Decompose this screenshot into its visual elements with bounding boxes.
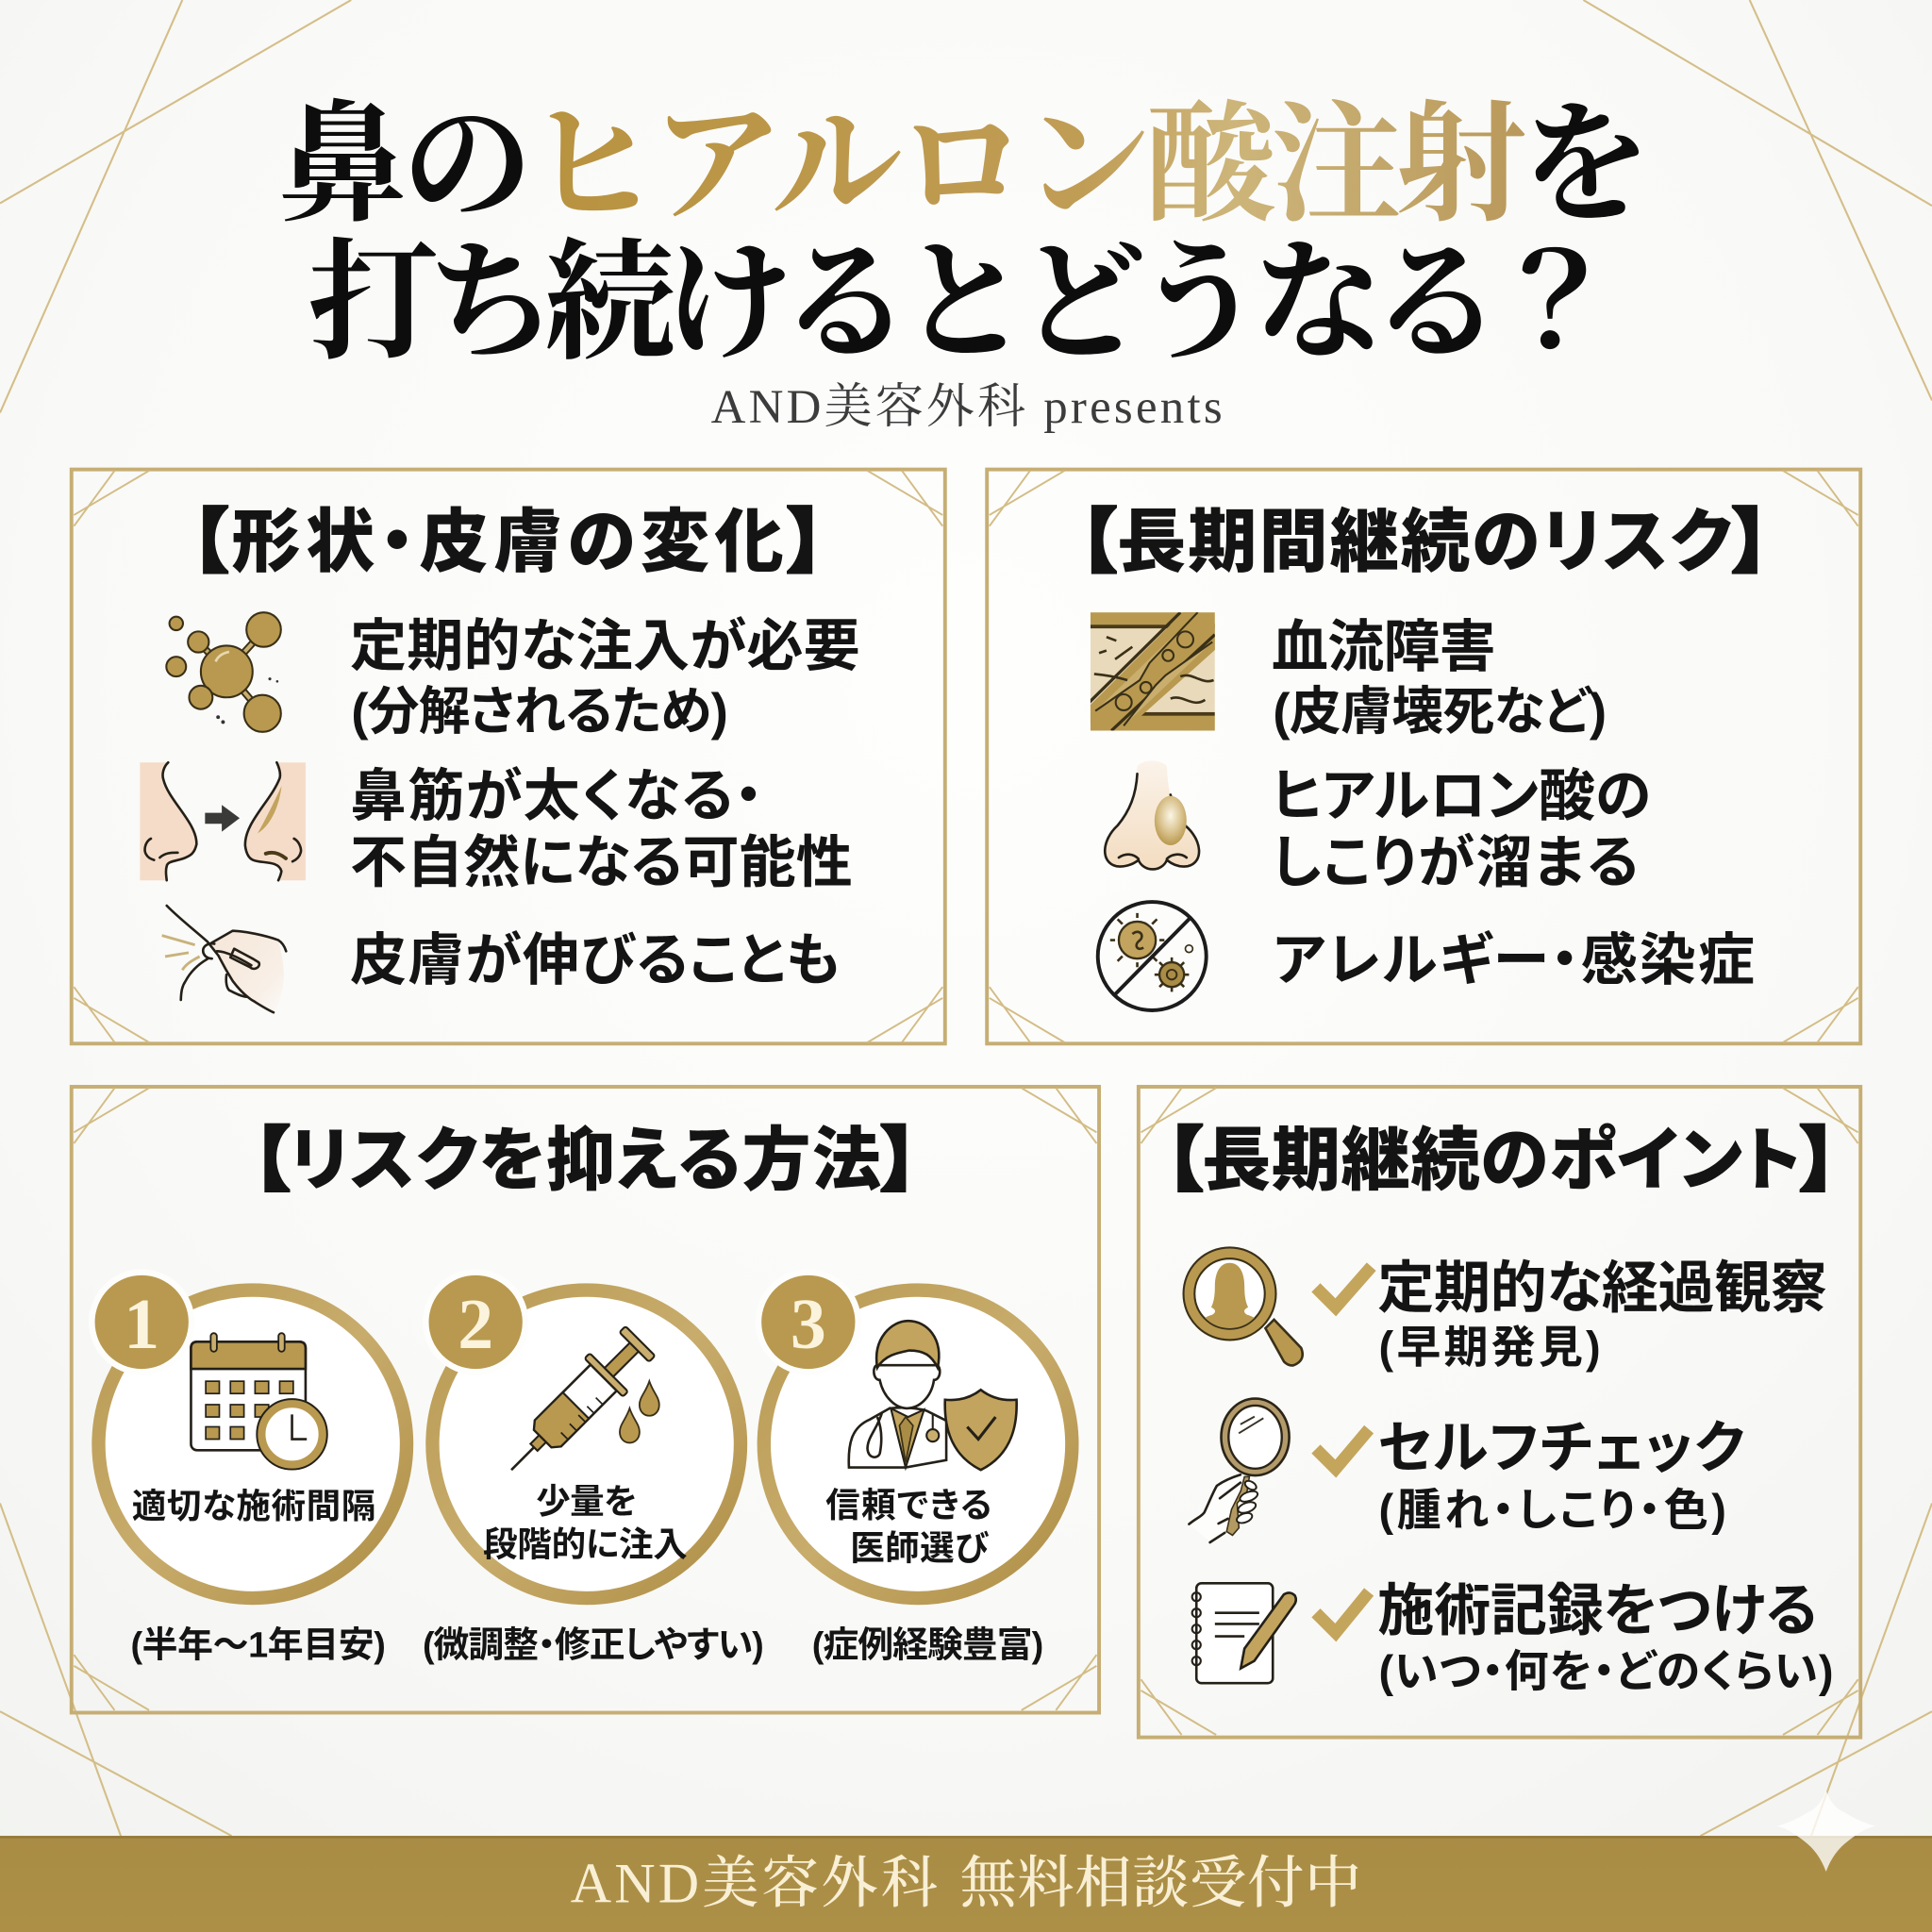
footer text: [571, 1852, 1361, 1915]
heading: long-term points: 【長期継続のポイント】: [1167, 1123, 1836, 1199]
item note: breakdown: (分解されるため): [351, 682, 728, 741]
icon: syringe and drops: [492, 1322, 659, 1490]
footer text: AND美容外科: [571, 1852, 938, 1915]
item text: hyaluronic acid: ヒアルロン酸の: [1272, 765, 1651, 828]
icon: nose bridge before and after: [140, 762, 306, 880]
item text: regular injections: 定期的な注入が必要: [350, 614, 860, 677]
item text: lumps accumulate: しこりが溜まる: [1272, 831, 1639, 894]
step 3 label: [825, 1486, 991, 1568]
icon: molecule: [166, 612, 281, 732]
subtitle: AND美容外科 presents: [711, 381, 1223, 434]
title: 打ち続けるとどうなる？: [308, 231, 1621, 375]
step 3 label: 信頼できる: [825, 1486, 991, 1524]
item text: blood flow disorder: 血流障害: [1272, 616, 1496, 679]
icon: calendar and clock: [191, 1333, 327, 1470]
step 2 label: [483, 1482, 688, 1564]
step badge 2: [423, 1269, 528, 1375]
icon: sparkle: [1776, 1790, 1875, 1872]
icon: nose with lump: [1105, 761, 1199, 869]
step 1 label: 適切な施術間隔: [132, 1487, 375, 1525]
step 3 label: 医師選び: [850, 1529, 989, 1568]
icon: hand mirror: [1189, 1399, 1290, 1542]
panel: long-term risks: [987, 470, 1860, 1043]
check mark 1: [1316, 1267, 1372, 1307]
item text: unnatural: 不自然になる可能性: [350, 831, 853, 894]
icon: notebook and pencil: [1192, 1583, 1296, 1683]
panel: long-term points: [1139, 1087, 1860, 1738]
step 1: appropriate interval: [89, 1269, 407, 1598]
step badge 3: [756, 1269, 861, 1375]
step 2 label: 少量を: [536, 1482, 637, 1521]
step 2: small staged injections: [423, 1269, 741, 1598]
note: treatment interval: (半年～1年目安): [130, 1626, 386, 1666]
icon: blood vessel blockage: [1091, 612, 1215, 730]
icon: magnifier with person: [1184, 1247, 1303, 1365]
item text: regular observation: 定期的な経過観察: [1377, 1257, 1827, 1320]
item note: when what how much: (いつ・何を・どのくらい): [1379, 1646, 1834, 1696]
icon: doctor with shield: [849, 1321, 1017, 1470]
title: 鼻のヒアルロン酸注射を: [277, 93, 1651, 238]
heading: shape and skin changes: 【形状・皮膚の変化】: [192, 505, 823, 581]
step badge 1: [89, 1269, 194, 1375]
panel: shape and skin changes: [72, 470, 945, 1043]
heading: ways to reduce risk: 【リスクを抑える方法】: [254, 1123, 917, 1199]
check mark 2: [1316, 1429, 1369, 1469]
icon: pinching stretched skin: [162, 906, 286, 1012]
item note: swelling lumps color: (腫れ・しこり・色): [1379, 1485, 1726, 1535]
item text: treatment record: 施術記録をつける: [1377, 1579, 1818, 1642]
note: easy adjustment: (微調整・修正しやすい): [423, 1626, 764, 1666]
panel: ways to reduce risk: [72, 1087, 1099, 1713]
step 3: trusted doctor: [756, 1269, 1072, 1598]
step badge 2: 2: [458, 1285, 493, 1364]
step 2 label: 段階的に注入: [483, 1525, 688, 1564]
item note: early detection: (早期発見): [1379, 1323, 1601, 1373]
footer band: [0, 1836, 1932, 1932]
icon: no bacteria: [1098, 902, 1207, 1010]
item text: skin stretches: 皮膚が伸びることも: [350, 928, 841, 991]
item text: self check: セルフチェック: [1377, 1417, 1744, 1480]
title: [277, 93, 1651, 375]
note: rich experience: (症例経験豊富): [812, 1626, 1043, 1666]
step badge 1: 1: [124, 1285, 159, 1364]
step badge 3: 3: [791, 1285, 826, 1364]
heading: long-term risks: 【長期間継続のリスク】: [1080, 505, 1768, 581]
item text: thicker nose bridge: 鼻筋が太くなる・: [350, 765, 762, 828]
check mark 3: [1316, 1592, 1369, 1633]
footer text: 無料相談受付中: [959, 1852, 1361, 1915]
item text: allergy and infection: アレルギー・感染症: [1273, 928, 1755, 991]
item note: skin necrosis: (皮膚壊死など): [1273, 682, 1607, 741]
